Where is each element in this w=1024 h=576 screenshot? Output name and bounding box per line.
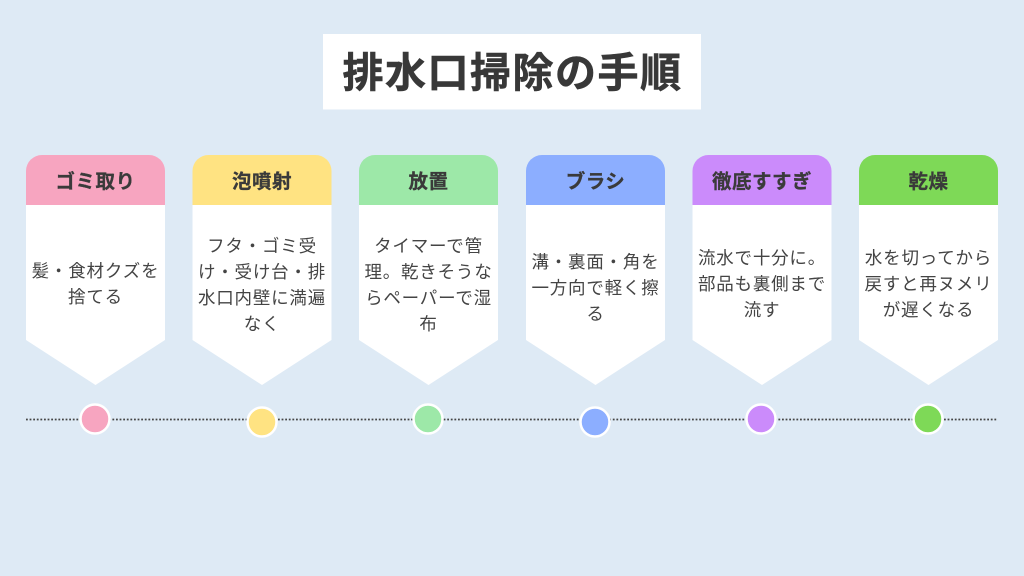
panel: step 4: 溝・裏面・角を bbox=[531, 252, 660, 272]
panel: step 6: が遅くなる bbox=[883, 300, 974, 320]
panel: step 3: 放置 bbox=[408, 171, 449, 193]
panel: step 4: ブラシ bbox=[566, 170, 625, 193]
panel: step 4: 一方向で軽く擦 bbox=[531, 278, 660, 298]
panel: step 2: なく bbox=[244, 314, 280, 334]
panel: step 5 bbox=[692, 155, 832, 385]
panel: step 1: ゴミ取り bbox=[55, 170, 136, 193]
panel: step 2: 水口内壁に満遍 bbox=[198, 288, 326, 308]
panel: step 5: 流水で十分に。 bbox=[698, 248, 826, 268]
panel: step 3: らペーパーで湿 bbox=[365, 288, 492, 308]
panel: step 3: タイマーで管 bbox=[374, 236, 483, 256]
timeline marker 5 bbox=[746, 404, 776, 434]
timeline marker 4 bbox=[580, 408, 610, 436]
panel: step 5: 部品も裏側まで bbox=[698, 274, 826, 294]
title bbox=[323, 34, 701, 110]
panel: step 6: 水を切ってから bbox=[865, 248, 992, 268]
panel: step 6 bbox=[859, 155, 998, 385]
panel: step 5: 流す bbox=[744, 300, 780, 320]
panel: step 3 bbox=[359, 155, 498, 385]
panel: step 2 bbox=[192, 155, 332, 385]
panel: step 1: 捨てる bbox=[68, 287, 123, 307]
panel: step 2: け・受け台・排 bbox=[198, 262, 326, 282]
timeline marker 2 bbox=[248, 408, 276, 436]
panel: step 2: 泡噴射 bbox=[232, 171, 292, 193]
panel: step 3: 布 bbox=[419, 314, 438, 334]
panel: step 3: 理。乾きそうな bbox=[364, 262, 493, 282]
timeline marker 1 bbox=[80, 404, 110, 434]
timeline marker 6 bbox=[914, 404, 942, 434]
panel: step 1: 髪・食材クズを bbox=[32, 261, 159, 281]
panel: step 5: 徹底すすぎ bbox=[712, 170, 812, 193]
panel: step 6: 乾燥 bbox=[908, 171, 949, 193]
panel: step 4: る bbox=[586, 304, 605, 324]
panel: step 2: フタ・ゴミ受 bbox=[207, 236, 317, 256]
timeline marker 3 bbox=[414, 404, 442, 434]
panel: step 1 bbox=[26, 155, 165, 385]
panel: step 4 bbox=[526, 155, 665, 385]
panel: step 6: 戻すと再ヌメリ bbox=[864, 274, 993, 294]
title: 排水口掃除の手順 bbox=[342, 50, 682, 96]
